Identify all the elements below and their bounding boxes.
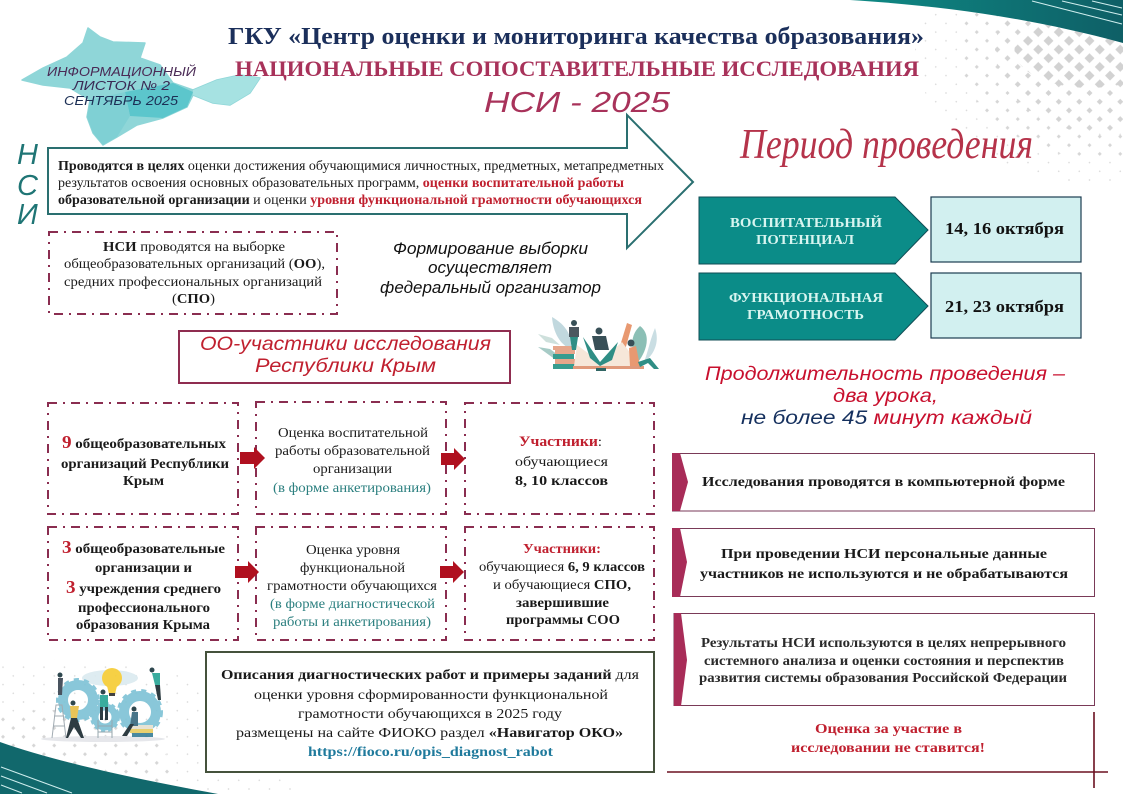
text: federal organiser: осуществляет: [428, 258, 552, 277]
row 2: school count box: организации и: [95, 561, 192, 576]
panel: sample note: (СПО): [172, 292, 215, 307]
row 2: school count box: 3 общеобразовательные: [62, 537, 225, 557]
map of Crimea with newsletter label: ИНФОРМАЦИОННЫЙ: [47, 63, 197, 79]
panel: sample note: общеобразовательных организаций ( ОО),: [64, 257, 325, 272]
row 1: participants box: обучающиеся: [515, 455, 609, 470]
row 1: assessment box: [256, 402, 446, 514]
row 1: school count box: Крым: [123, 474, 164, 489]
row 1: assessment box: (в форме анкетирования): [273, 481, 431, 496]
panel: participants heading: ОО-участники исследования: [200, 334, 491, 355]
panel: diagnostic materials: [206, 652, 654, 772]
period row 2: dates: 21, 23 октября: [945, 297, 1064, 316]
callout: no grade: исследовании не ставится!: [791, 741, 985, 756]
info box: personal data: При проведении НСИ персональные данные: [721, 547, 1047, 562]
row 1: assessment box: организации: [313, 462, 393, 477]
icon: team with gears and light bulb: [41, 668, 165, 742]
period row 1: label chevron: [699, 197, 928, 264]
panel: diagnostic materials: грамотности обучающихся в 2025 году: [298, 707, 562, 722]
vertical acronym НСИ: С: [17, 170, 39, 202]
text: duration: не более 45 минут каждый: [741, 408, 1033, 429]
info box: results use: развития системы образования Российской Федерации: [699, 671, 1067, 686]
title: study name: НАЦИОНАЛЬНЫЕ СОПОСТАВИТЕЛЬНЫЕ ИССЛЕДОВАНИЯ: [235, 56, 919, 81]
text: duration: Продолжительность проведения –: [705, 364, 1065, 385]
vertical acronym НСИ: И: [17, 199, 38, 231]
text: federal organiser: федеральный организатор: [380, 278, 601, 297]
row 2: participants box: обучающиеся 6, 9 классов: [479, 560, 645, 575]
row 1: school count box: 9 общеобразовательных: [62, 432, 226, 452]
row 2: assessment box: [256, 527, 446, 640]
row 2: school count box: образования Крыма: [76, 618, 210, 633]
row 2: participants box: завершившие: [516, 596, 609, 611]
arrow: row 2 first: [235, 561, 259, 583]
period row 2: label chevron: [699, 273, 928, 340]
row 1: assessment box: работы образовательной: [275, 444, 431, 459]
text: federal organiser: [380, 239, 601, 297]
panel: goals arrow: результатов освоения основных образовательных программ, оценки воспитательной работы: [58, 176, 624, 191]
halftone dots: bottom left: [0, 660, 300, 794]
panel: goals arrow: [48, 115, 693, 248]
heading: period: Период проведения: [739, 122, 1033, 168]
icon: open book with readers: [538, 317, 659, 371]
decorative teal band: bottom left: [0, 742, 218, 794]
info box: results use: [674, 613, 1094, 706]
row 2: assessment box: Оценка уровня: [306, 543, 401, 558]
period row 2: dates: [931, 273, 1081, 338]
arrow: row 1 second: [441, 448, 465, 470]
row 1: school count box: организаций Республики: [61, 457, 229, 472]
row 1: school count box: [48, 403, 238, 514]
arrow: row 1 first: [240, 447, 265, 469]
panel: diagnostic materials: оценки уровня сформированности функциональной: [254, 688, 609, 703]
row 2: participants box: программы СОО: [506, 613, 620, 628]
row 2: participants box: [465, 527, 654, 640]
info box: results use: Результаты НСИ используются в целях непрерывного: [701, 636, 1066, 651]
panel: participants heading: [179, 331, 510, 383]
info box: computer form: Исследования проводятся в компьютерной форме: [702, 475, 1065, 490]
info box: results use: системного анализа и оценки состояния и перспектив: [704, 654, 1064, 669]
panel: goals arrow: Проводятся в целях оценки достижения обучающимися личностных, предметных, метапредметных: [58, 159, 664, 174]
decorative teal band: top right: [850, 0, 1123, 43]
row 2: participants box: и обучающиеся СПО,: [493, 578, 631, 593]
halftone dots: top right: [915, 0, 1123, 185]
period row 1: label chevron: ПОТЕНЦИАЛ: [756, 233, 855, 248]
row 1: participants box: 8, 10 классов: [515, 474, 609, 489]
period row 2: label chevron: ФУНКЦИОНАЛЬНАЯ: [729, 291, 883, 306]
callout: no grade: [791, 722, 985, 756]
panel: diagnostic materials: Описания диагностических работ и примеры заданий для: [221, 668, 640, 683]
panel: diagnostic materials: размещены на сайте ФИОКО раздел «Навигатор ОКО»: [236, 726, 623, 741]
row 2: school count box: 3 учреждения среднего: [66, 577, 221, 597]
map of Crimea with newsletter label: ЛИСТОК № 2: [72, 78, 171, 93]
panel: participants heading: Республики Крым: [255, 356, 436, 377]
text: duration: [705, 364, 1065, 429]
period row 1: dates: [931, 197, 1081, 262]
row 2: school count box: [48, 527, 238, 640]
text: federal organiser: Формирование выборки: [393, 239, 589, 258]
text: duration: два урока,: [833, 386, 938, 407]
row 2: assessment box: грамотности обучающихся: [267, 579, 438, 594]
row 1: participants box: Участники:: [519, 434, 602, 450]
panel: goals arrow: образовательной организации и оценки уровня функциональной грамотности обучающихся: [58, 193, 642, 208]
row 2: assessment box: работы и анкетирования): [273, 615, 431, 630]
info box: personal data: участников не используются и не обрабатываются: [700, 567, 1068, 582]
info box: personal data: [672, 528, 1094, 597]
vertical acronym НСИ: [17, 139, 39, 231]
period row 1: dates: 14, 16 октября: [945, 219, 1064, 238]
period row 1: label chevron: ВОСПИТАТЕЛЬНЫЙ: [730, 214, 882, 231]
map of Crimea with newsletter label: СЕНТЯБРЬ 2025: [64, 93, 179, 108]
panel: sample note: НСИ проводятся на выборке: [103, 240, 285, 255]
row 2: assessment box: (в форме диагностической: [270, 597, 436, 612]
panel: sample note: [49, 232, 337, 314]
row 1: assessment box: Оценка воспитательной: [278, 426, 429, 441]
map of Crimea with newsletter label: [22, 28, 260, 145]
callout: no grade: Оценка за участие в: [815, 722, 963, 737]
arrow: row 2 second: [440, 561, 464, 583]
row 2: assessment box: функциональной: [300, 561, 406, 576]
info box: computer form: [672, 453, 1094, 511]
title: organisation: ГКУ «Центр оценки и мониторинга качества образования»: [228, 24, 924, 50]
panel: diagnostic materials: https://fioco.ru/opis_diagnost_rabot: [308, 745, 553, 760]
panel: sample note: средних профессиональных организаций: [64, 275, 323, 290]
row 1: participants box: [465, 403, 654, 514]
title: НСИ 2025: НСИ - 2025: [484, 87, 671, 119]
row 2: participants box: Участники:: [523, 542, 601, 557]
vertical acronym НСИ: Н: [17, 139, 38, 171]
period row 2: label chevron: ГРАМОТНОСТЬ: [747, 308, 864, 323]
row 2: school count box: профессионального: [78, 601, 210, 616]
